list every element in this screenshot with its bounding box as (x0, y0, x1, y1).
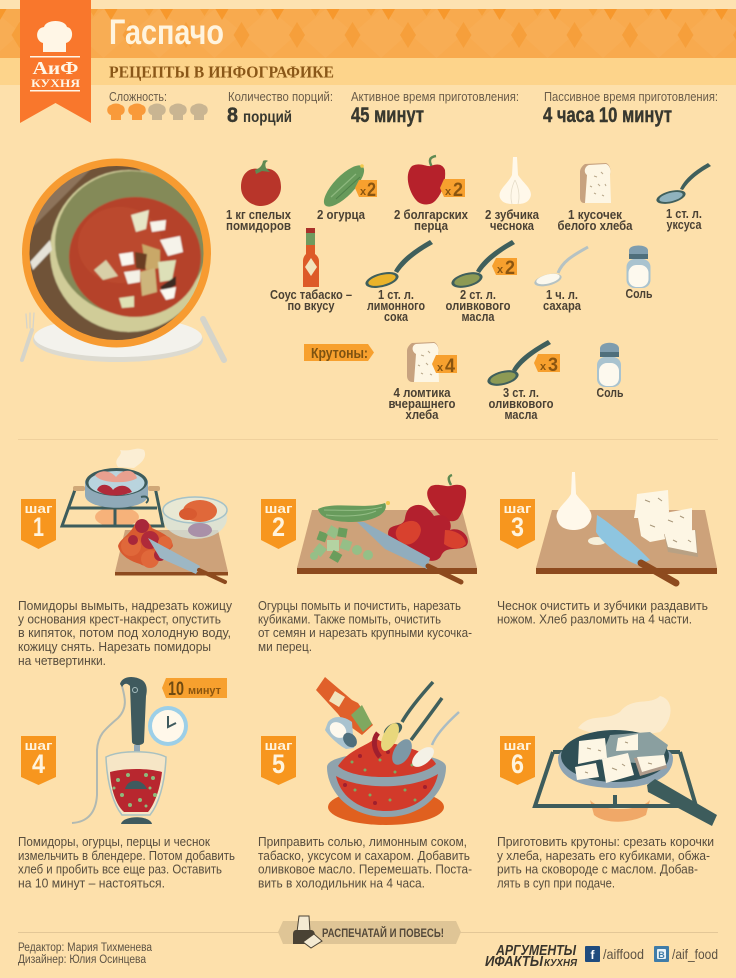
step badge (500, 736, 535, 785)
step 1 (18, 449, 232, 668)
credits (18, 942, 153, 966)
instructions: в кипяток, потом под холодную воду, (18, 625, 231, 640)
instructions: ми перец. (258, 639, 312, 654)
meta: passive time: 4 часа 10 минут (543, 104, 672, 127)
step 6 (497, 696, 717, 890)
label: 2 ст. л. (460, 288, 496, 302)
callout: 10 minutes: минут (188, 685, 222, 697)
ingredient: crouton salt (596, 343, 624, 400)
step badge: 1 (33, 512, 44, 542)
ingredient: lemon juice spoon: сока (384, 310, 409, 324)
instructions: Приправить солью, лимонным соком, (258, 834, 467, 849)
logo ribbon (20, 0, 91, 123)
ingredient: cucumbers (317, 160, 377, 222)
ingredient: lemon juice spoon (364, 240, 433, 324)
ingredient: crouton oil spoon (486, 340, 560, 422)
publisher logo: АРГУМЕНТЫ (495, 942, 577, 959)
ingredient: white bread: белого хлеба (558, 219, 633, 233)
instructions (18, 834, 235, 890)
logo wordmark: АиФ (32, 58, 78, 78)
step badge: 2 (272, 512, 285, 542)
print call to action: РАСПЕЧАТАЙ И ПОВЕСЬ! (322, 925, 444, 940)
step badge: 4 (32, 749, 45, 779)
label: 4 ломтика (394, 386, 451, 400)
social: facebook (585, 946, 644, 962)
ingredient: bell peppers: x (445, 186, 452, 198)
instructions (258, 834, 472, 890)
publisher logo (485, 942, 578, 970)
instructions: измельчить в блендере. Потом добавить (18, 848, 235, 863)
instructions: хлеб и пробить все еще раз. Оставить (18, 862, 222, 876)
meta: difficulty: Сложность: (109, 90, 167, 104)
ingredient: stale bread: хлеба (406, 408, 439, 422)
instructions: лять в суп при подаче. (497, 876, 615, 890)
label: 1 ст. л. (666, 207, 702, 221)
illustration: blanching tomatoes (62, 449, 163, 527)
ingredient: crouton oil spoon: масла (504, 408, 538, 422)
instructions (258, 598, 472, 654)
ingredient: stale bread (388, 342, 457, 422)
ingredient: crouton oil spoon: оливкового (488, 397, 554, 411)
ingredient: tabasco: по вкусу (288, 299, 335, 313)
step badge: 3 (511, 512, 524, 542)
header banner (0, 0, 736, 85)
icon: printer (293, 916, 322, 948)
callout: 10 minutes (162, 678, 227, 700)
multiplier badge (492, 258, 517, 275)
instructions: у хлеба, нарезать его кубиками, обжа- (497, 848, 710, 863)
label: 2 болгарских (394, 208, 468, 222)
instructions (497, 598, 708, 626)
step badge (261, 736, 296, 785)
icon: clock (148, 706, 188, 746)
meta: passive time: Пассивное время приготовления: (544, 90, 718, 104)
instructions: у основания крест-накрест, опустить (18, 612, 221, 626)
meta: active time: Активное время приготовления: (351, 90, 519, 104)
illustration: hand blender (72, 677, 166, 824)
photo: plate of gazpacho (20, 150, 224, 362)
meta: active time: 45 минут (351, 104, 424, 127)
social: vkontakte: В (658, 950, 665, 960)
ingredient: cucumbers: x (360, 186, 367, 198)
ingredient: tomato: помидоров (226, 219, 291, 233)
ingredient: stale bread: вчерашнего (388, 397, 456, 411)
ingredient: crouton oil spoon: x (540, 361, 547, 373)
label: 1 кг спелых (226, 208, 291, 222)
multiplier badge (355, 180, 377, 197)
step badge: 5 (272, 749, 285, 779)
meta: portions: 8 (227, 104, 238, 127)
label: 1 ч. л. (546, 288, 578, 302)
step 4 (18, 677, 235, 890)
illustration: salt shaker (325, 717, 360, 750)
ingredient: olive oil spoon (446, 240, 517, 324)
ingredient: garlic: чеснока (490, 219, 535, 233)
label: 2 огурца (317, 208, 366, 222)
meta: passive time (543, 90, 718, 127)
ingredient: lemon juice spoon: лимонного (367, 299, 425, 313)
ingredient: salt (626, 246, 653, 301)
step badge: шаг (24, 501, 53, 516)
ingredient: stale bread: x (437, 362, 444, 374)
instructions: Огурцы помыть и почистить, нарезать (258, 598, 461, 613)
instructions: кожицу снять. Нарезать помидоры (18, 639, 211, 654)
multiplier badge (440, 179, 465, 197)
ingredient: cucumbers: 2 (367, 180, 376, 201)
ingredient: stale bread: 4 (445, 356, 455, 377)
instructions: табаско, уксусом и сахаром. Добавить (258, 848, 470, 863)
meta: portions: Количество порций: (228, 90, 333, 104)
logo subtitle: КУХНЯ (31, 76, 80, 90)
instructions: Чеснок очистить и зубчики раздавить (497, 598, 708, 613)
instructions (18, 598, 232, 668)
social: facebook: f (590, 948, 596, 962)
illustration: tabasco bottle (316, 677, 373, 735)
ingredient: vinegar spoon: уксуса (666, 218, 702, 232)
instructions: Помидоры вымыть, надрезать кожицу (18, 598, 232, 613)
credits: Редактор: Мария Тихменева (18, 942, 153, 954)
ingredient: bell peppers (394, 156, 468, 233)
illustration: cutting board with tomatoes (115, 497, 228, 582)
illustration: frying croutons (535, 696, 717, 826)
step badge (261, 499, 296, 549)
social: vkontakte (654, 946, 718, 962)
ingredient: olive oil spoon: масла (462, 310, 495, 324)
instructions: от семян и нарезать крупными кусочка- (258, 625, 472, 640)
step badge: шаг (24, 738, 53, 753)
croutons label: Крутоны: (311, 345, 368, 362)
instructions: оливковое масло. Перемешать. Поста- (258, 862, 472, 876)
ingredient: tabasco (270, 228, 352, 313)
instructions: вить в холодильник на 4 часа. (258, 876, 425, 890)
ingredient: olive oil spoon: x (497, 264, 504, 276)
label: Соль (626, 287, 653, 301)
illustration: chopping cucumber and pepper (297, 475, 477, 582)
title: Гаспачо (109, 13, 224, 52)
instructions (497, 834, 714, 890)
illustration: crushing garlic, breaking bread (536, 472, 717, 583)
ingredient: tomato (226, 160, 291, 233)
instructions: кубиками. Также помыть, очистить (258, 612, 441, 626)
ingredient: bell peppers: 2 (453, 180, 463, 201)
ingredient: bell peppers: перца (414, 219, 449, 233)
ingredient: white bread (558, 163, 633, 233)
social: vkontakte: /aif_food (672, 946, 718, 962)
label: 3 ст. л. (503, 386, 539, 400)
callout: 10 minutes: 10 (168, 679, 184, 700)
ingredient: vinegar spoon (655, 163, 711, 232)
meta: portions: порций (243, 109, 292, 126)
label: 2 зубчика (485, 208, 540, 222)
ingredient: sugar spoon (533, 247, 588, 313)
meta: difficulty (107, 90, 208, 120)
social: facebook: /aiffood (603, 946, 644, 962)
ingredient: garlic (485, 157, 540, 233)
step badge (500, 499, 535, 549)
subtitle: РЕЦЕПТЫ В ИНФОГРАФИКЕ (109, 62, 334, 82)
step badge: шаг (504, 501, 532, 516)
step badge: шаг (504, 738, 532, 753)
step 5 (258, 677, 472, 890)
multiplier badge (432, 355, 457, 373)
ingredient: crouton oil spoon: 3 (548, 355, 558, 376)
publisher logo: КУХНЯ (544, 958, 578, 969)
icon: chef hat (37, 21, 72, 52)
label: 1 кусочек (568, 208, 623, 222)
step badge: 6 (511, 749, 524, 779)
illustration: seasoning bowl (327, 733, 446, 825)
illustration: spoons (377, 682, 459, 771)
step 3 (497, 472, 717, 626)
instructions: на 10 минут – настояться. (18, 876, 165, 890)
instructions: на четвертинки. (18, 653, 106, 668)
ingredient: olive oil spoon: 2 (505, 258, 515, 279)
meta: active time (351, 90, 519, 127)
instructions: Приготовить крутоны: срезать корочки (497, 834, 714, 849)
ingredient: olive oil spoon: оливкового (446, 299, 511, 313)
instructions: ножом. Хлеб разломить на 4 части. (497, 612, 692, 626)
credits: Дизайнер: Юлия Осинцева (18, 954, 147, 966)
step 2 (258, 475, 477, 654)
instructions: рить на сковороде с маслом. Добав- (497, 862, 698, 876)
ingredient: sugar spoon: сахара (543, 299, 582, 313)
label: Соус табаско – (270, 288, 352, 302)
label: 1 ст. л. (378, 288, 414, 302)
publisher logo: ИФАКТЫ (485, 953, 544, 970)
instructions: Помидоры, огурцы, перцы и чеснок (18, 834, 210, 849)
print banner (278, 916, 461, 948)
step badge: шаг (264, 738, 293, 753)
step badge (21, 736, 56, 785)
step badge: шаг (264, 501, 293, 516)
meta: portions (227, 90, 333, 127)
multiplier badge (534, 354, 560, 372)
label: Соль (596, 386, 624, 400)
step badge (21, 499, 56, 549)
